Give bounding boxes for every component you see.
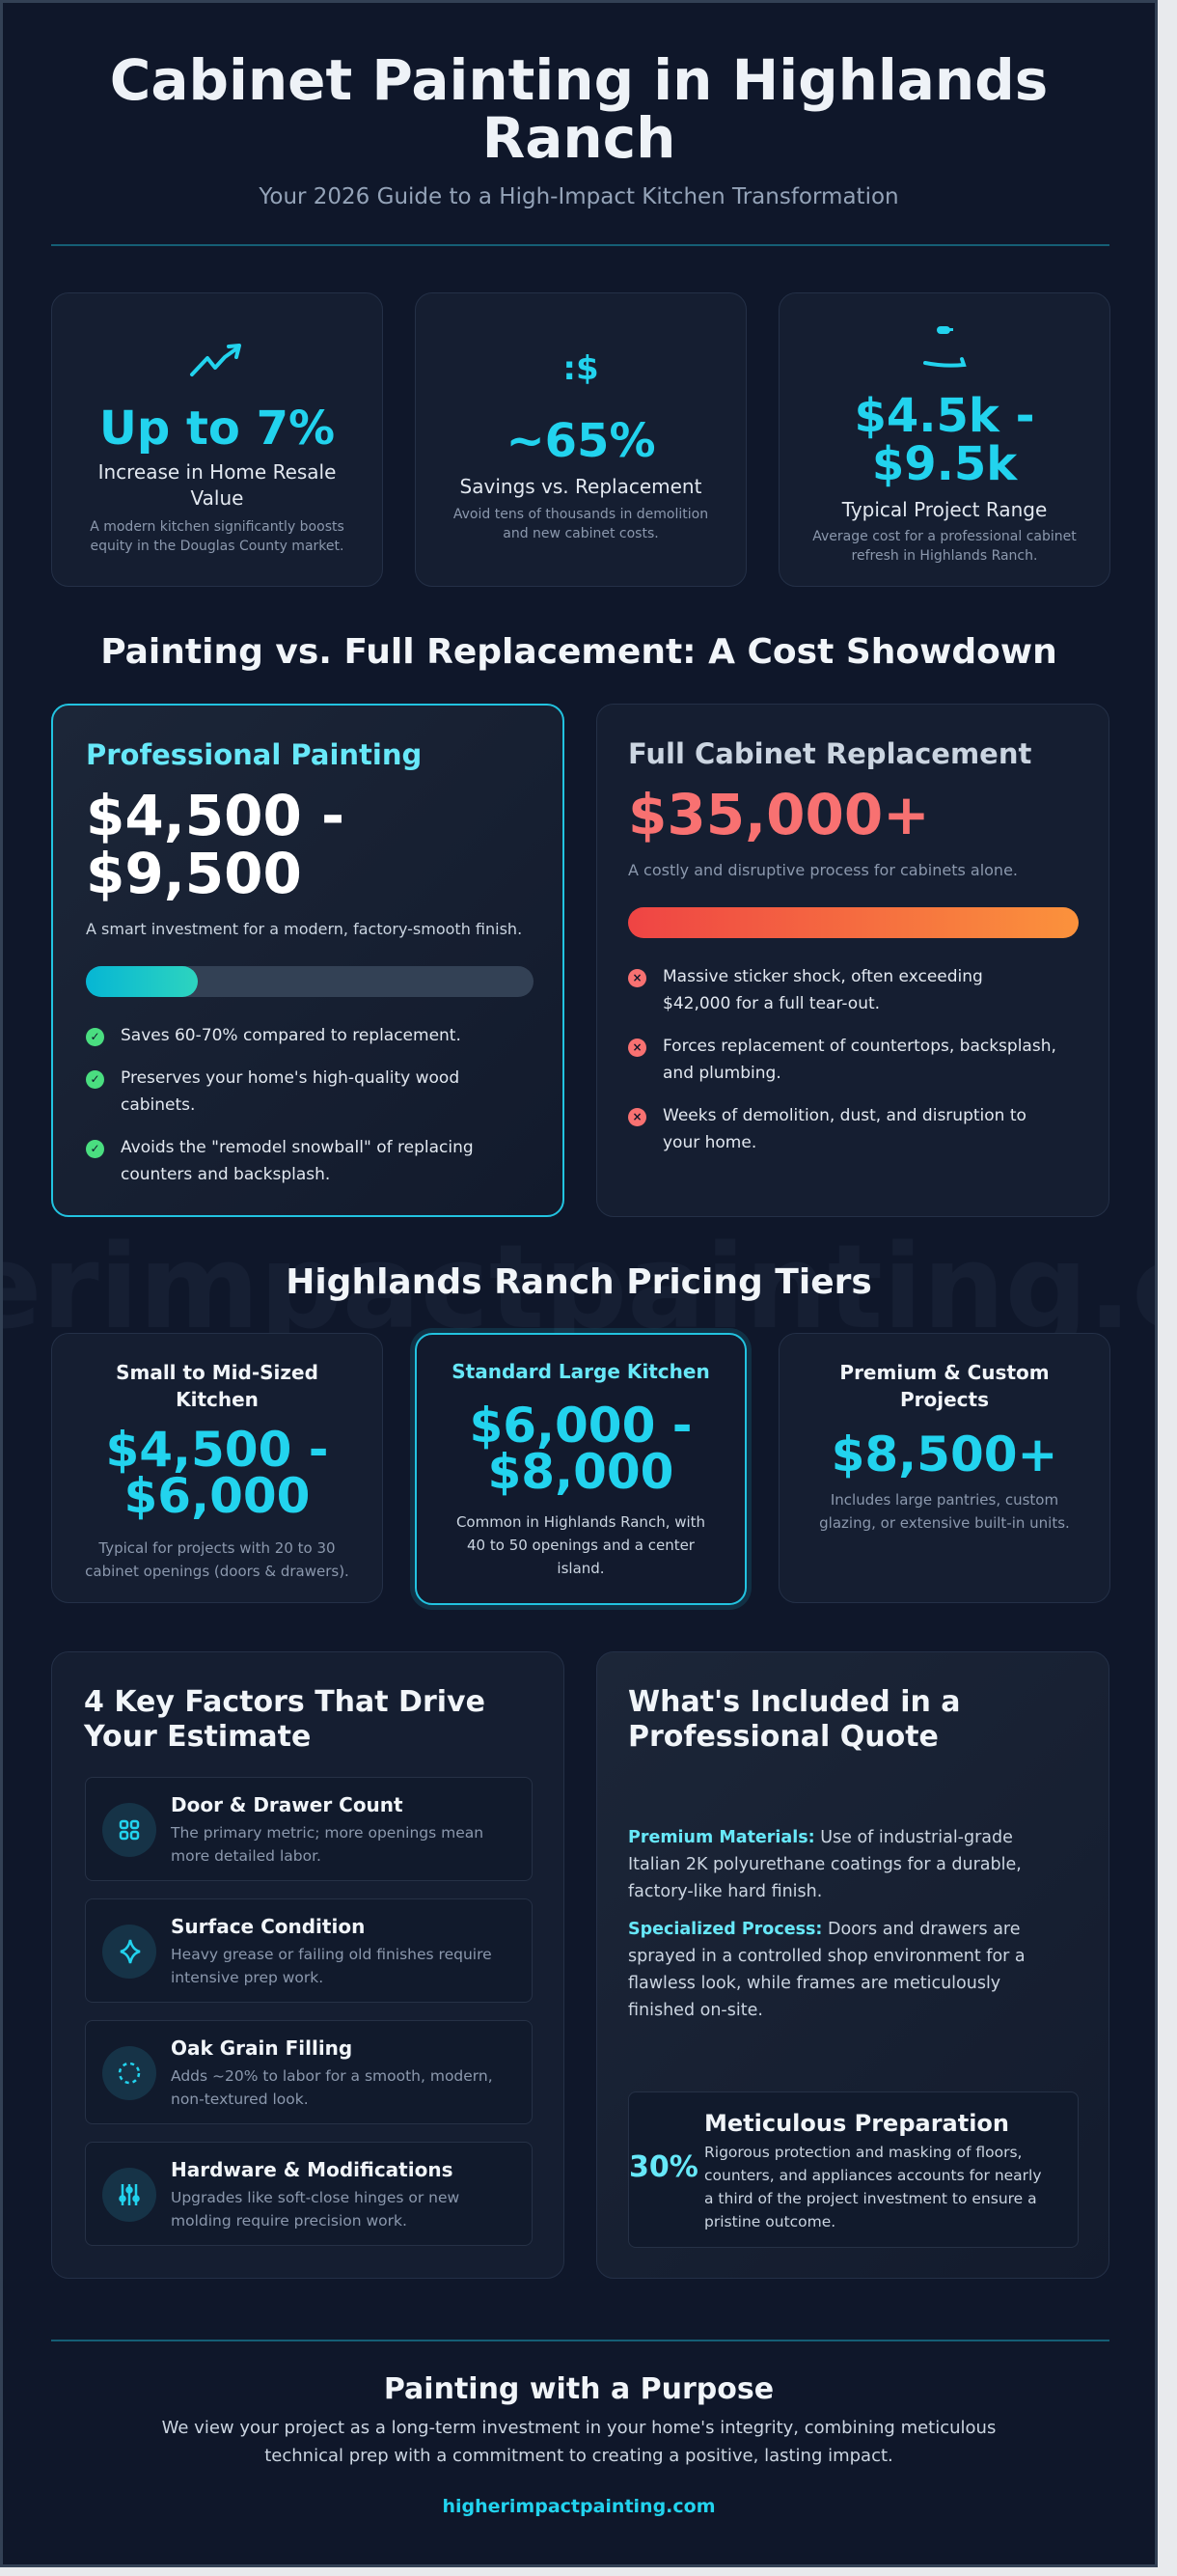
callout: meticulous preparation: counters, and appliances accounts for nearly [704, 2167, 1042, 2184]
icon: paint roller [923, 326, 967, 368]
label: Increase in Home Resale Value [98, 460, 336, 510]
benefits list: ✓ [90, 1030, 100, 1043]
icon: trend up [189, 344, 241, 376]
drawbacks list: $42,000 for a full tear-out. [663, 994, 880, 1013]
benefits list: Preserves your home's high-quality wood cabinets. [121, 1068, 459, 1115]
heading [83, 1685, 485, 1754]
tier: small: $4,500 - [105, 1422, 329, 1478]
callout: meticulous preparation: a third of the project investment to ensure a [704, 2190, 1037, 2207]
tier: premium: $8,500+ [832, 1426, 1057, 1482]
description: Avoid tens of thousands in demolition and new cabinet costs. [453, 507, 708, 541]
factor: door count [85, 1777, 533, 1881]
panel: professional painting [51, 704, 564, 1217]
description: Average cost for a professional cabinet refresh in Highlands Ranch. [812, 529, 1077, 564]
title: Cabinet Painting in Highlands [110, 47, 1048, 113]
value: $9.5k [872, 437, 1017, 491]
stat card: range [779, 292, 1110, 587]
tier: standard large (highlighted) [415, 1333, 747, 1605]
tier: standard large (highlighted): $6,000 - [469, 1398, 693, 1454]
heading: 4 Key Factors That Drive [84, 1685, 485, 1719]
drawbacks list: Massive sticker shock, often exceeding [663, 967, 983, 986]
factor: door count: Door & Drawer Count [171, 1793, 403, 1816]
benefits list: ✓ [90, 1142, 100, 1155]
tier: small: Typical for projects with 20 to 30 cabinet openings (doors & drawers). [85, 1539, 349, 1580]
factor: hardware [85, 2142, 533, 2246]
tier: small: $6,000 [124, 1468, 310, 1524]
bar [628, 907, 1079, 938]
value: Up to 7% [99, 402, 335, 456]
description: A costly and disruptive process for cabinets alone. [628, 861, 1018, 879]
subtitle: Your 2026 Guide to a High-Impact Kitchen Transformation [259, 184, 899, 209]
value: $4.5k - [855, 389, 1034, 443]
description: A modern kitchen significantly boosts equity in the Douglas County market. [90, 519, 344, 554]
drawbacks list: × [632, 1110, 643, 1123]
callout: meticulous preparation: Rigorous protection and masking of floors, [704, 2144, 1022, 2161]
drawbacks list [628, 967, 1056, 1152]
heading [628, 1685, 961, 1754]
label: Savings vs. Replacement [460, 475, 701, 498]
value: ~65% [506, 414, 656, 468]
title: Full Cabinet Replacement [628, 737, 1031, 770]
tier: standard large (highlighted): $8,000 [488, 1444, 673, 1500]
heading: Your Estimate [84, 1720, 311, 1754]
benefits list: ✓ [90, 1072, 100, 1086]
benefits list: Saves 60-70% compared to replacement. [121, 1026, 461, 1045]
callout: meticulous preparation: Meticulous Preparation [704, 2110, 1009, 2137]
factor: surface: Heavy grease or failing old finishes require intensive prep work. [171, 1946, 492, 1986]
description: A smart investment for a modern, factory-smooth finish. [86, 920, 522, 938]
tier: small [51, 1333, 383, 1603]
tier: standard large (highlighted): Common in Highlands Ranch, with 40 to 50 openings and a center island. [456, 1513, 705, 1577]
footer text: We view your project as a long-term investment in your home's integrity, combining meticulous technical prep with a commitment to creating a positive, lasting impact. [162, 2418, 996, 2466]
tier: premium: Includes large pantries, custom glazing, or extensive built-in units. [819, 1491, 1070, 1532]
drawbacks list: × [632, 1040, 643, 1054]
factor: oak grain: Adds ~20% to labor for a smooth, modern, non-textured look. [171, 2067, 493, 2108]
title: Professional Painting [86, 738, 422, 771]
drawbacks list: × [632, 971, 643, 984]
tier: premium [779, 1333, 1110, 1603]
factor: hardware: Hardware & Modifications [171, 2158, 452, 2181]
factor: door count: The primary metric; more openings mean more detailed labor. [171, 1824, 483, 1865]
icon: dollar: :$ [562, 349, 599, 388]
heading: pricing tiers: Highlands Ranch Pricing Tiers [286, 1262, 872, 1302]
title: Ranch [482, 105, 675, 171]
price: $9,500 [86, 841, 302, 906]
benefits list: Avoids the "remodel snowball" of replacing counters and backsplash. [121, 1138, 474, 1184]
label: Typical Project Range [842, 498, 1047, 521]
price: $4,500 - [86, 783, 344, 848]
panel: what's included [596, 1651, 1109, 2279]
footer link: higherimpactpainting.com [442, 2496, 716, 2517]
factor: hardware: Upgrades like soft-close hinges or new molding require precision work. [171, 2189, 459, 2230]
text: premium materials: Premium Materials: Use of industrial-grade Italian 2K polyurethane coatings for a durable, factory-like hard finish. [628, 1828, 1022, 1901]
factor: oak grain [85, 2020, 533, 2124]
drawbacks list: Weeks of demolition, dust, and disruption to your home. [663, 1106, 1026, 1152]
panel: key factors [51, 1651, 564, 2279]
benefits list [86, 1026, 474, 1184]
price: $35,000+ [628, 782, 930, 847]
stat card: savings [415, 292, 747, 587]
stat card: resale [51, 292, 383, 587]
drawbacks list: Forces replacement of countertops, backsplash, and plumbing. [663, 1037, 1056, 1083]
footer heading: Painting with a Purpose [384, 2372, 774, 2406]
callout: meticulous preparation [628, 2091, 1079, 2248]
title [110, 47, 1048, 171]
price [86, 783, 344, 906]
text: specialized process: Specialized Process: Doors and drawers are sprayed in a controlled shop environment for a flawless look, while frames are meticulously finished on-site. [628, 1920, 1026, 2020]
tier: standard large (highlighted): Standard Large Kitchen [452, 1360, 710, 1383]
heading: Professional Quote [628, 1720, 939, 1754]
tier: premium: Premium & Custom Projects [839, 1361, 1050, 1411]
panel: full replacement [596, 704, 1109, 1217]
bar [86, 966, 534, 997]
heading: cost showdown: Painting vs. Full Replacement: A Cost Showdown [100, 632, 1057, 672]
factor: surface: Surface Condition [171, 1915, 365, 1938]
factor: surface [85, 1898, 533, 2003]
heading: What's Included in a [628, 1685, 961, 1719]
callout: meticulous preparation: pristine outcome. [704, 2213, 835, 2230]
value [855, 389, 1034, 491]
factor: oak grain: Oak Grain Filling [171, 2036, 352, 2060]
tier: small: Small to Mid-Sized Kitchen [116, 1361, 318, 1411]
callout: meticulous preparation: 30% [629, 2150, 698, 2184]
